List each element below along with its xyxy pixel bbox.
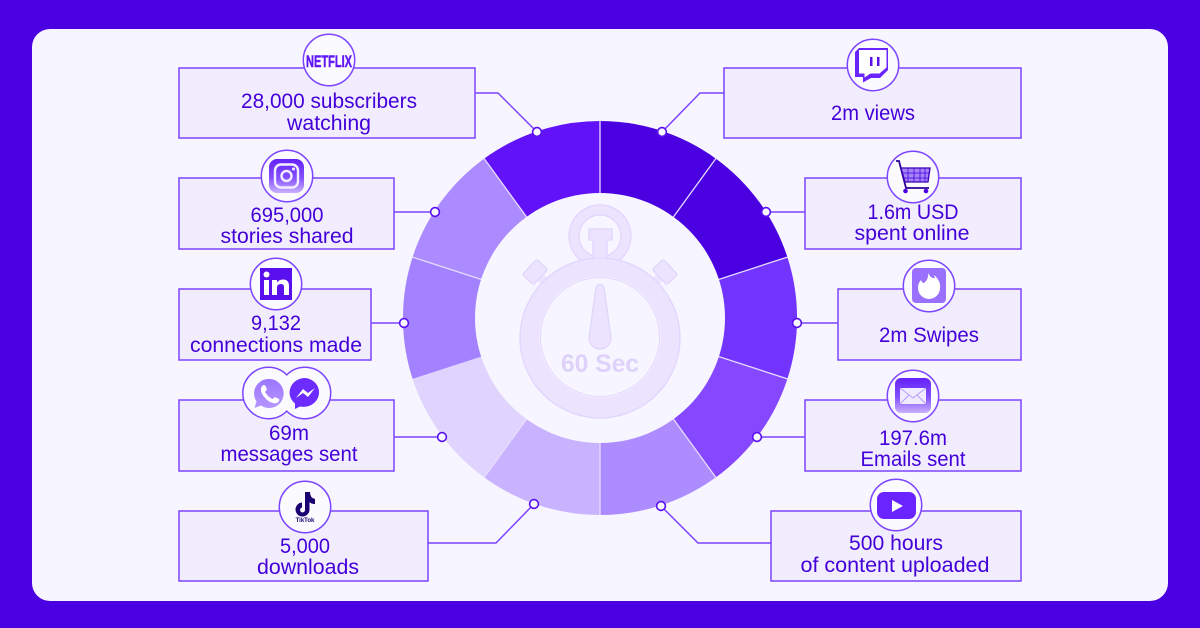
card: TikTok downloads: 5,000 bbox=[280, 535, 330, 558]
icon: Twitch bbox=[855, 48, 888, 82]
icon: YouTube bbox=[877, 492, 916, 519]
icon: Netflix wordmark: NETFLIX bbox=[306, 53, 352, 71]
icon: Tinder bbox=[912, 268, 946, 303]
card: Tinder swipes bbox=[793, 260, 1021, 360]
icon: shopping cart bbox=[896, 161, 930, 193]
card: WhatsApp and Messenger messages: 69m bbox=[269, 422, 309, 445]
card: WhatsApp and Messenger messages bbox=[179, 367, 446, 471]
icon: email envelope bbox=[895, 378, 931, 413]
card: TikTok downloads: downloads bbox=[257, 556, 359, 579]
card: emails sent bbox=[753, 370, 1021, 471]
stopwatch with 60 Sec label bbox=[520, 205, 680, 418]
icon: TikTok bbox=[296, 492, 315, 524]
card: Netflix subscribers: watching bbox=[286, 112, 371, 135]
card: emails sent: 197.6m bbox=[879, 427, 947, 450]
card: TikTok downloads bbox=[179, 481, 538, 581]
card: online spending bbox=[762, 151, 1021, 249]
card: online spending: spent online bbox=[854, 222, 970, 245]
card: Twitch views: 2m views bbox=[831, 102, 915, 125]
card: YouTube uploads bbox=[657, 479, 1021, 581]
card: LinkedIn connections bbox=[179, 258, 408, 360]
card: Netflix subscribers: 28,000 subscribers bbox=[241, 90, 417, 113]
card: Netflix subscribers bbox=[179, 34, 541, 138]
card: Twitch views bbox=[658, 39, 1021, 138]
card: emails sent: Emails sent bbox=[860, 448, 966, 471]
card: Tinder swipes: 2m Swipes bbox=[879, 324, 979, 347]
icon: TikTok: TikTok bbox=[296, 518, 315, 524]
card: Instagram stories: stories shared bbox=[220, 225, 354, 248]
card: YouTube uploads: 500 hours bbox=[849, 532, 943, 555]
card: Instagram stories bbox=[179, 150, 439, 249]
icon: LinkedIn bbox=[260, 268, 292, 300]
card: YouTube uploads: of content uploaded bbox=[800, 554, 990, 577]
card: Instagram stories: 695,000 bbox=[250, 204, 324, 227]
card: LinkedIn connections: 9,132 bbox=[251, 312, 301, 335]
card: online spending: 1.6m USD bbox=[868, 201, 958, 224]
card: WhatsApp and Messenger messages: messages sent bbox=[220, 443, 358, 466]
icon: Instagram bbox=[269, 159, 304, 193]
card: LinkedIn connections: connections made bbox=[190, 334, 362, 357]
icon: WhatsApp bbox=[254, 379, 284, 408]
stopwatch with 60 Sec label: 60 Sec bbox=[561, 350, 639, 378]
icon: Messenger bbox=[290, 378, 319, 409]
donut chart: ten time segments bbox=[403, 121, 797, 515]
